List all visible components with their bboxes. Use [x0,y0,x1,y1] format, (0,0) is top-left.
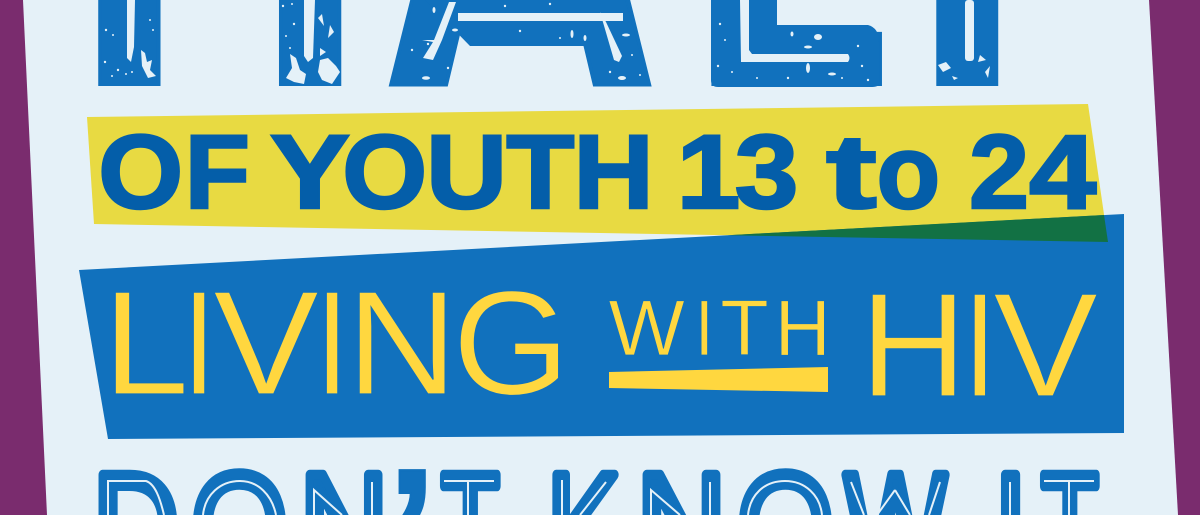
word: WITH: H [775,283,831,372]
word: LIVING [102,259,570,426]
subheading: OF YOUTH 13 to 24: F [185,114,250,231]
subheading: OF YOUTH 13 to 24 [98,113,1096,231]
closing heading: DON'T KNOW IT (cropped at bottom) [93,432,1099,515]
green banner overlap [728,215,1108,242]
word: HIV: V [993,263,1098,428]
word: LIVING: I [182,259,216,426]
subheading: OF YOUTH 13 to 24: 3 [735,114,798,231]
word: LIVING: G [452,260,570,426]
word: WITH: T [720,283,769,372]
subheading: OF YOUTH 13 to 24: o [877,113,940,231]
underline beneath WITH [609,367,828,392]
blue banner [79,214,1124,439]
word: HIV [860,261,1098,428]
yellow banner [87,104,1108,242]
word: WITH [609,283,831,372]
subheading: OF YOUTH 13 to 24: O [98,113,183,230]
word: LIVING: L [102,261,189,426]
word: WITH: W [609,284,685,372]
distress specks [104,3,869,81]
word: LIVING: V [213,261,319,426]
subheading: OF YOUTH 13 to 24: U [426,114,507,231]
word: WITH: I [695,284,714,372]
subheading: OF YOUTH 13 to 24: 1 [677,114,740,231]
word: LIVING: I [315,259,349,426]
subheading: OF YOUTH 13 to 24: t [826,113,877,230]
word: HIV: H [860,263,967,428]
subheading: OF YOUTH 13 to 24: H [573,113,654,230]
subheading: OF YOUTH 13 to 24: 2 [969,113,1029,230]
subheading: OF YOUTH 13 to 24: O [342,113,427,230]
word: HIV: I [963,261,997,428]
word: LIVING: N [346,260,458,425]
subheading: OF YOUTH 13 to 24: 4 [1029,113,1096,230]
subheading: OF YOUTH 13 to 24: Y [270,113,350,230]
subheading: OF YOUTH 13 to 24: T [506,113,574,230]
heading word: HALF (distressed, cropped at top) [73,0,1158,204]
inline strokes in closing heading [108,480,1094,515]
